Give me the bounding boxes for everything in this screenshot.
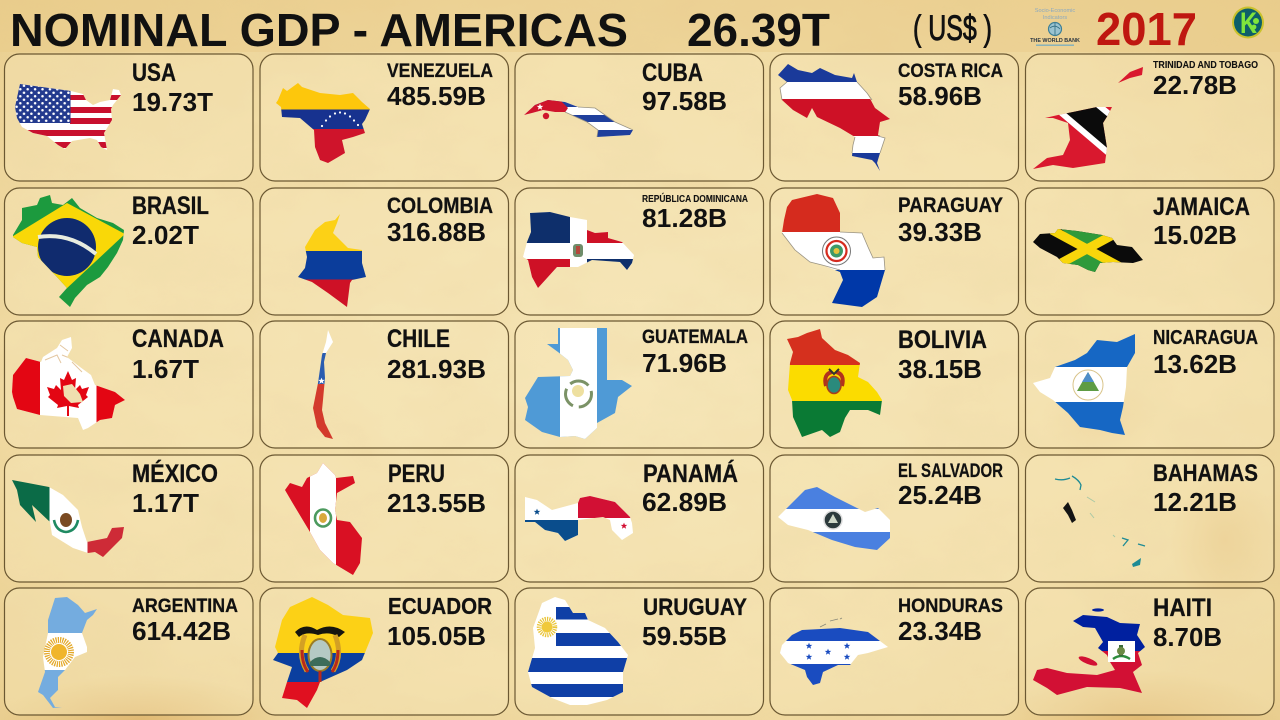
name: MÉXICO — [132, 459, 218, 488]
value: 105.05B — [387, 621, 486, 651]
icon: World Bank logo: Indicators — [1043, 15, 1067, 21]
value: 97.58B — [642, 86, 727, 116]
card: Paraguay — [770, 188, 1018, 315]
map: Panama flag — [525, 496, 633, 541]
year: 2017 — [1096, 3, 1197, 55]
name: NICARAGUA — [1153, 327, 1258, 349]
card: Bolivia — [770, 321, 1018, 448]
card: El Salvador — [770, 455, 1018, 582]
value: 2.02T — [132, 220, 199, 250]
card: Jamaica — [1026, 188, 1274, 315]
name: TRINIDAD AND TOBAGO — [1153, 59, 1258, 71]
card: Ecuador — [260, 588, 508, 715]
value: 25.24B — [898, 480, 982, 510]
total GDP: 26.39T — [687, 4, 830, 56]
map: Cuba flag — [524, 100, 634, 137]
card: Colombia — [260, 188, 508, 315]
value: 1.67T — [132, 354, 199, 384]
value: 12.21B — [1153, 487, 1237, 517]
value: 19.73T — [132, 87, 213, 117]
name: URUGUAY — [643, 594, 747, 621]
name: USA — [132, 59, 176, 87]
value: 38.15B — [898, 354, 982, 384]
name: PARAGUAY — [898, 194, 1003, 217]
map: Honduras flag — [778, 618, 890, 688]
name: HAITI — [1153, 594, 1212, 622]
name: JAMAICA — [1153, 193, 1250, 221]
map: Uruguay flag — [525, 594, 631, 708]
name: BOLIVIA — [898, 326, 987, 354]
value: 614.42B — [132, 616, 231, 646]
map: Guatemala flag — [525, 328, 632, 439]
name: HONDURAS — [898, 595, 1003, 617]
card: Nicaragua — [1026, 321, 1274, 448]
card: Chile — [260, 321, 508, 448]
value: 81.28B — [642, 203, 727, 233]
value: 39.33B — [898, 217, 982, 247]
card: Argentina — [4, 588, 253, 715]
map: El Salvador flag — [778, 487, 890, 550]
value: 15.02B — [1153, 220, 1237, 250]
icon: channel logo K: K — [1240, 7, 1257, 40]
map: Colombia flag — [298, 214, 366, 307]
card: Republica Dominicana — [515, 188, 764, 315]
card: Canada — [4, 321, 253, 448]
icon: World Bank logo — [1030, 8, 1080, 46]
card: Uruguay — [515, 588, 764, 715]
map: Peru flag — [285, 463, 362, 575]
value: 71.96B — [642, 348, 727, 378]
name: ARGENTINA — [132, 595, 238, 617]
card: Trinidad and Tobago — [1026, 54, 1274, 181]
card: Brasil — [4, 188, 253, 315]
map: Jamaica flag — [1033, 229, 1143, 272]
map: Haiti flag — [1030, 608, 1148, 697]
card: Peru — [260, 455, 508, 582]
name: BRASIL — [132, 192, 209, 220]
map: Brazil flag — [13, 195, 124, 307]
map: Ecuador flag — [270, 594, 376, 712]
map: Bolivia flag — [784, 326, 884, 439]
name: CANADA — [132, 325, 224, 353]
card: Venezuela — [260, 54, 508, 181]
map: Nicaragua flag — [1033, 334, 1135, 435]
map: Canada flag — [12, 337, 125, 430]
name: REPÚBLICA DOMINICANA — [642, 192, 748, 205]
card: Panama — [515, 455, 764, 582]
value: 1.17T — [132, 488, 199, 518]
name: EL SALVADOR — [898, 460, 1003, 482]
value: 485.59B — [387, 81, 486, 111]
name: PANAMÁ — [643, 459, 738, 488]
value: 316.88B — [387, 217, 486, 247]
map: Mexico flag — [12, 480, 124, 557]
icon: World Bank logo: Socio-Economic — [1035, 8, 1075, 14]
value: 8.70B — [1153, 622, 1222, 652]
icon: World Bank logo: THE WORLD BANK — [1030, 38, 1080, 44]
name: BAHAMAS — [1153, 460, 1258, 487]
name: COLOMBIA — [387, 193, 493, 218]
map: Venezuela flag — [276, 83, 370, 163]
value: 62.89B — [642, 487, 727, 517]
map: Argentina flag — [38, 597, 97, 708]
title: NOMINAL GDP - AMERICAS — [10, 4, 628, 56]
card: Guatemala — [515, 321, 764, 448]
name: CHILE — [387, 325, 450, 353]
value: 22.78B — [1153, 70, 1237, 100]
map: Costa Rica flag — [778, 64, 890, 171]
name: PERU — [388, 460, 445, 488]
name: CUBA — [642, 59, 703, 87]
name: VENEZUELA — [387, 60, 493, 82]
map: Dominican Republic flag — [523, 212, 634, 288]
map: Chile flag — [313, 330, 333, 439]
name: GUATEMALA — [642, 326, 748, 348]
currency label: ( US$ ) — [913, 9, 992, 48]
card: Bahamas — [1026, 455, 1274, 582]
value: 59.55B — [642, 621, 727, 651]
card: USA — [4, 54, 253, 181]
value: 23.34B — [898, 616, 982, 646]
value: 13.62B — [1153, 349, 1237, 379]
card: Cuba — [515, 54, 764, 181]
name: ECUADOR — [388, 593, 492, 619]
card: Honduras — [770, 588, 1018, 715]
value: 281.93B — [387, 354, 486, 384]
card: Costa Rica — [770, 54, 1018, 181]
value: 213.55B — [387, 488, 486, 518]
name: COSTA RICA — [898, 60, 1003, 82]
card: Haiti — [1026, 588, 1274, 715]
map: Trinidad and Tobago flag — [1030, 67, 1143, 172]
map: Paraguay flag — [782, 194, 886, 307]
map: USA flag — [15, 84, 121, 150]
card: Mexico — [4, 455, 253, 582]
value: 58.96B — [898, 81, 982, 111]
map: Bahamas islands — [1055, 476, 1145, 567]
icon: channel logo K — [1232, 6, 1264, 40]
